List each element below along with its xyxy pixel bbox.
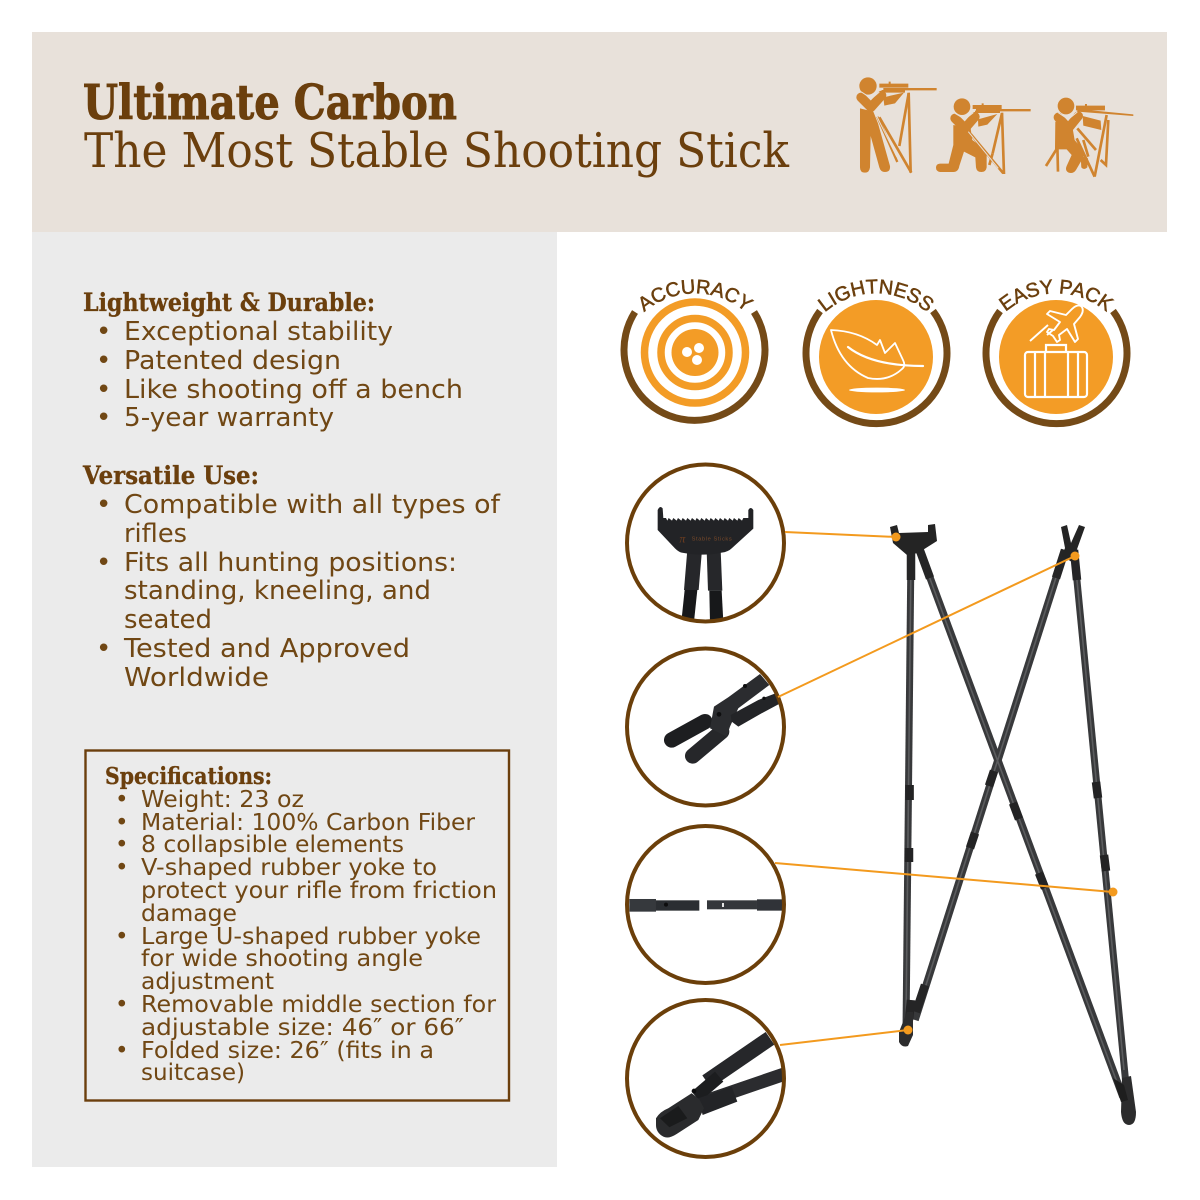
- text block: versatile use: standing, kneeling, and: [124, 576, 431, 606]
- panel: specifications box: •: [115, 1038, 129, 1064]
- detail circle: U-shaped yoke: Stable Sticks: [692, 537, 732, 543]
- panel: specifications box: protect your rifle from friction: [141, 878, 497, 904]
- text block: versatile use: seated: [124, 605, 212, 635]
- panel: specifications box: Specifications:: [105, 763, 272, 790]
- text block: lightweight and durable: [83, 288, 463, 433]
- detail circle outline: removable middle section: [627, 826, 784, 983]
- detail circle: removable middle section: [629, 899, 782, 912]
- badge: easy pack: [982, 279, 1130, 428]
- panel: specifications box: •: [115, 832, 129, 858]
- panel: specifications box: Removable middle section for: [141, 992, 497, 1018]
- title: [83, 75, 790, 179]
- badge: easy pack: EASY PACK: [998, 279, 1114, 312]
- text block: lightweight and durable: Lightweight & Durable:: [83, 288, 375, 317]
- text block: versatile use: Fits all hunting positions:: [124, 548, 457, 578]
- panel: specifications box: adjustment: [141, 969, 274, 995]
- badge: lightness: LIGHTNESS: [817, 279, 934, 312]
- panel: specifications box: Folded size: 26″ (fits in a: [141, 1038, 434, 1064]
- badge: accuracy: [620, 279, 768, 424]
- text block: versatile use: [82, 461, 501, 693]
- panel: specifications box: adjustable size: 46″ or 66″: [141, 1015, 464, 1041]
- panel: specifications box: Weight: 23 oz: [141, 787, 304, 813]
- panel: specifications box: •: [115, 992, 129, 1018]
- panel: specifications box: •: [115, 787, 129, 813]
- text block: lightweight and durable: •: [96, 346, 111, 376]
- panel: specifications box: 8 collapsible elements: [141, 832, 404, 858]
- icon: standing shooter: [859, 77, 937, 173]
- panel: specifications box: V-shaped rubber yoke to: [141, 855, 437, 881]
- badge: lightness: [802, 279, 950, 428]
- text block: lightweight and durable: Exceptional stability: [124, 317, 393, 347]
- text block: versatile use: rifles: [124, 519, 187, 549]
- badge: accuracy: ACCURACY: [640, 279, 754, 312]
- panel: specifications box: suitcase): [141, 1060, 245, 1086]
- detail circle outline: rubber foot: [627, 1000, 784, 1157]
- panel: specifications box: Large U-shaped rubber yoke: [141, 924, 481, 950]
- icon: seated shooter: [1046, 98, 1133, 177]
- text block: lightweight and durable: •: [96, 317, 111, 347]
- panel: left text column: [32, 232, 557, 1167]
- detail circle: U-shaped yoke: π: [679, 532, 686, 546]
- header banner: [32, 32, 1167, 232]
- text block: versatile use: Tested and Approved: [123, 634, 410, 664]
- text block: versatile use: •: [96, 490, 111, 520]
- panel: specifications box: •: [115, 855, 129, 881]
- detail circle outline: V-shaped yoke: [627, 648, 784, 806]
- text block: versatile use: •: [96, 548, 111, 578]
- detail circle: rubber foot: [656, 1038, 787, 1138]
- panel: specifications box: damage: [141, 901, 237, 927]
- leader line: middle section callout: [775, 863, 1118, 896]
- panel: specifications box: [86, 750, 509, 1100]
- text block: lightweight and durable: 5-year warranty: [124, 403, 334, 433]
- icon: kneeling shooter: [936, 98, 1031, 174]
- detail circle outline: U-shaped yoke: [627, 464, 784, 622]
- text block: versatile use: Worldwide: [124, 663, 269, 693]
- product photo: folded-out shooting stick: [890, 524, 1136, 1125]
- leader line: foot callout: [780, 1026, 912, 1045]
- panel: specifications box: Material: 100% Carbon Fiber: [141, 810, 476, 836]
- text block: versatile use: Versatile Use:: [82, 461, 259, 490]
- text block: lightweight and durable: Patented design: [124, 346, 341, 376]
- panel: specifications box: for wide shooting angle: [141, 946, 423, 972]
- panel: specifications box: •: [115, 924, 129, 950]
- leader line: U yoke callout: [785, 532, 900, 542]
- detail circle: V-shaped yoke: [672, 674, 783, 756]
- panel: specifications box: •: [115, 810, 129, 836]
- text block: versatile use: Compatible with all types of: [124, 490, 501, 520]
- detail circle: U-shaped yoke: [658, 507, 753, 622]
- text block: versatile use: •: [96, 634, 111, 664]
- text block: lightweight and durable: •: [96, 403, 111, 433]
- title: The Most Stable Shooting Stick: [84, 123, 790, 179]
- text block: lightweight and durable: Like shooting off a bench: [124, 375, 463, 405]
- text block: lightweight and durable: •: [96, 375, 111, 405]
- title: Ultimate Carbon: [83, 75, 457, 131]
- leader line: V yoke callout: [778, 552, 1080, 697]
